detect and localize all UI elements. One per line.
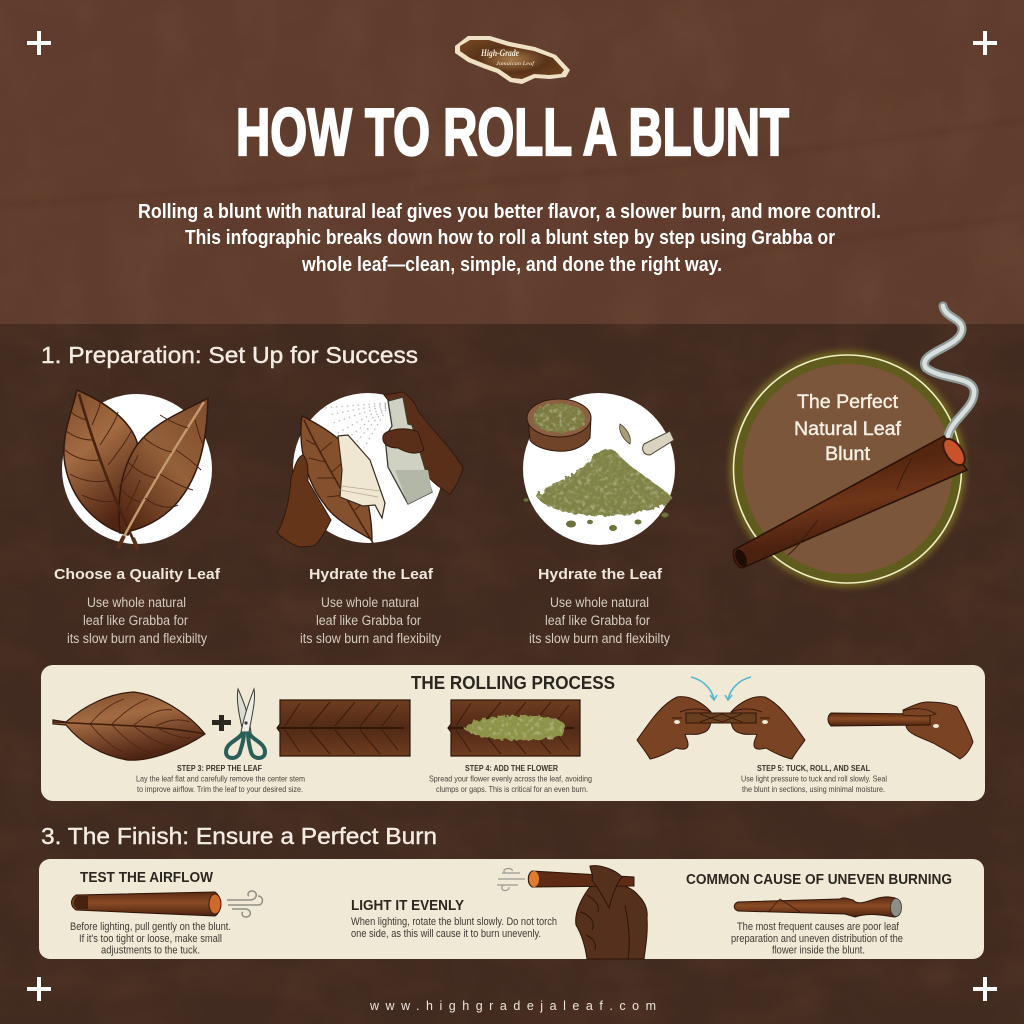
illustration: one hand with blunt [828, 702, 973, 759]
arrows: blue pinch arrows [691, 677, 751, 700]
title: HOW TO ROLL A BLUNT [236, 95, 789, 170]
medallion caption: The Perfect [797, 392, 899, 413]
step labels: preparation: Hydrate the Leaf [538, 566, 663, 583]
step labels: preparation: leaf like Grabba for [545, 613, 650, 628]
common cause block: flower inside the blunt. [772, 944, 865, 956]
step 4 text: Spread your flower evenly across the leaf, avoiding [429, 774, 592, 784]
intro paragraph [138, 201, 881, 276]
step 4 text: STEP 4: ADD THE FLOWER [465, 763, 559, 773]
common cause block: preparation and uneven distribution of the [731, 933, 903, 945]
step 4 text: clumps or gaps. This is critical for an even burn. [436, 784, 588, 794]
step labels: preparation: Hydrate the Leaf [309, 566, 434, 583]
intro paragraph: Rolling a blunt with natural leaf gives you better flavor, a slower burn, and more control. [138, 201, 881, 223]
smoke [925, 306, 974, 436]
section heading: finish: 3. The Finish: Ensure a Perfect Burn [41, 823, 437, 849]
test the airflow block: If it's too tight or loose, make small [79, 933, 222, 945]
logo: Jamaica leaf badge: Jamaican Leaf [496, 60, 536, 67]
panel heading: THE ROLLING PROCESS [411, 672, 615, 693]
footer website: www.highgradejaleaf.com [369, 999, 656, 1013]
step labels: preparation: Use whole natural [550, 595, 649, 610]
logo: Jamaica leaf badge [455, 36, 570, 84]
step 5 text: Use light pressure to tuck and roll slowly. Seal [741, 774, 887, 784]
step 3 text: Lay the leaf flat and carefully remove the center stem [136, 774, 305, 784]
illustration: hand holding blunt [528, 866, 647, 959]
step labels: preparation: leaf like Grabba for [83, 613, 188, 628]
light it evenly block: one side, as this will cause it to burn unevenly. [351, 928, 541, 940]
icon: grinder and flower pile [523, 393, 675, 545]
illustration: leaf with flower [448, 700, 580, 756]
light it evenly block: LIGHT IT EVENLY [351, 898, 464, 914]
icon: two quality leaves [62, 390, 212, 550]
step labels: preparation: leaf like Grabba for [316, 613, 421, 628]
icon: scissors [226, 689, 265, 758]
medallion caption [794, 392, 902, 465]
common cause block: COMMON CAUSE OF UNEVEN BURNING [686, 872, 952, 888]
test the airflow block: TEST THE AIRFLOW [80, 870, 213, 886]
step 5 text [741, 763, 887, 794]
background: lower leather [0, 324, 1024, 1024]
step labels: preparation [54, 566, 670, 646]
medallion caption: Natural Leaf [794, 419, 902, 440]
intro paragraph: whole leaf—clean, simple, and done the right way. [301, 254, 722, 276]
illustration: two hands tucking [637, 697, 805, 759]
step 4 text [429, 763, 592, 794]
step 3 text [136, 763, 305, 794]
big blunt [733, 436, 967, 568]
step labels: preparation: its slow burn and flexibilty [300, 631, 441, 646]
step labels: preparation: Use whole natural [321, 595, 419, 610]
common cause block: The most frequent causes are poor leaf [737, 921, 900, 933]
step labels: preparation: its slow burn and flexibilty [529, 631, 670, 646]
test the airflow block [70, 870, 262, 956]
medallion caption: Blunt [825, 444, 871, 465]
step 3 text: STEP 3: PREP THE LEAF [177, 763, 262, 773]
step 5 text: STEP 5: TUCK, ROLL, AND SEAL [757, 763, 871, 773]
perfect blunt medallion [730, 306, 974, 587]
step labels: preparation: Use whole natural [87, 595, 186, 610]
test the airflow block: adjustments to the tuck. [101, 944, 200, 956]
test the airflow block: Before lighting, pull gently on the blunt. [70, 921, 231, 933]
section heading: preparation: 1. Preparation: Set Up for Success [41, 342, 418, 368]
light it evenly block [351, 866, 647, 959]
light it evenly block: When lighting, rotate the blunt slowly. Do not torch [351, 916, 557, 928]
icon: hydrate leaf with spray [277, 392, 463, 547]
intro paragraph: This infographic breaks down how to roll a blunt step by step using Grabba or [185, 227, 835, 249]
step labels: preparation: its slow burn and flexibilty [67, 631, 207, 646]
illustration: trimmed leaf [277, 700, 410, 756]
panel: the finish [39, 859, 984, 959]
panel: the rolling process [41, 665, 985, 801]
background: upper leather [0, 0, 1024, 324]
illustration: whole leaf [53, 692, 205, 760]
plus sign [212, 715, 231, 731]
common cause block [686, 872, 952, 956]
step 5 text: the blunt in sections, using minimal moisture. [742, 784, 885, 794]
step labels: preparation: Choose a Quality Leaf [54, 566, 221, 583]
logo: Jamaica leaf badge: High-Grade [480, 48, 519, 58]
step 3 text: to improve airflow. Trim the leaf to your desired size. [137, 784, 303, 794]
